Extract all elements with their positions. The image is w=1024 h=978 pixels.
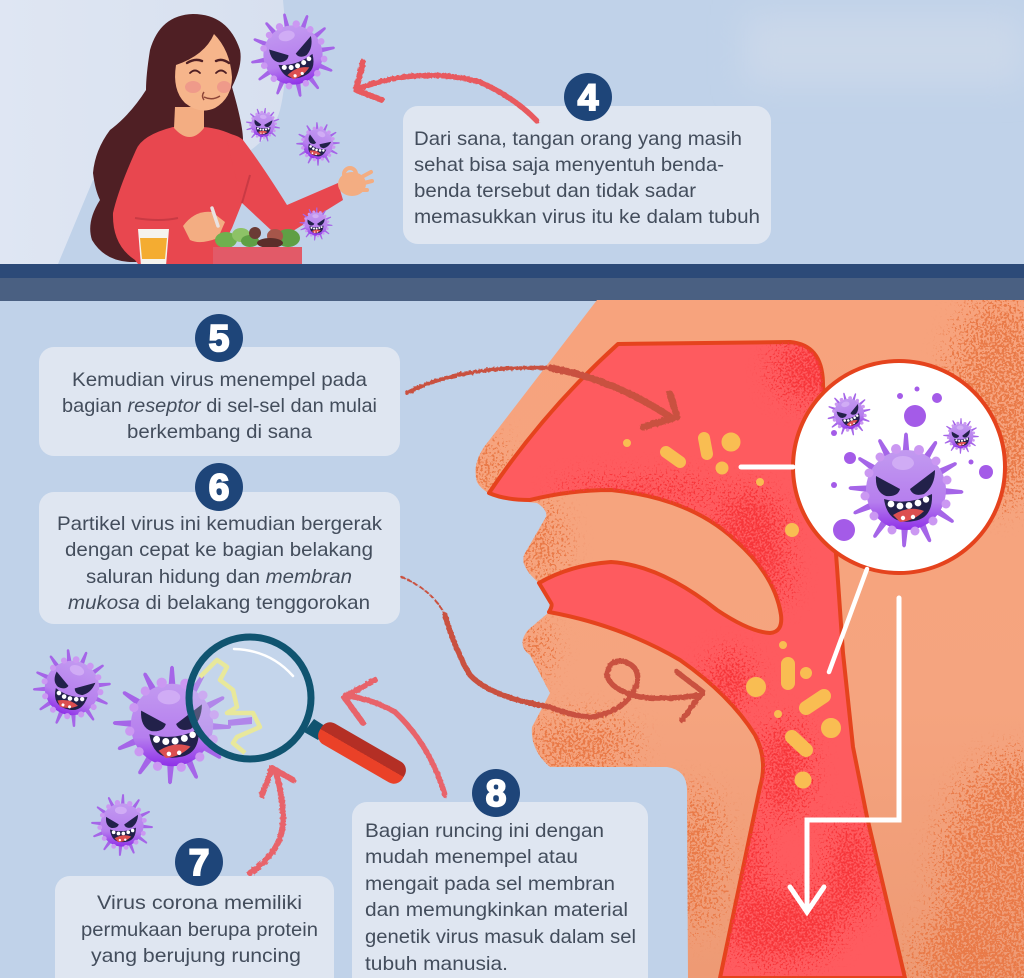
hand ok sign [338, 168, 372, 196]
text block 7 [81, 892, 318, 967]
salad bowl [213, 227, 302, 265]
cheeks [185, 81, 201, 93]
neck [174, 107, 204, 137]
text block 6: saluran hidung dan membran [86, 566, 352, 588]
magnifying glass [189, 637, 410, 787]
panel 5 [39, 347, 400, 456]
panel 4 [403, 106, 771, 244]
text block 7: yang berujung runcing [91, 945, 301, 967]
text block 6: Partikel virus ini kemudian bergerak [57, 513, 382, 535]
badge 6: 6 [209, 467, 229, 508]
text block 8 [365, 820, 636, 975]
virus: upper left [822, 388, 876, 441]
glass of juice [138, 229, 169, 266]
mouth [202, 92, 220, 100]
text block 4: Dari sana, tangan orang yang masih [414, 128, 742, 150]
badge 8: 8 [486, 773, 506, 814]
text block 8: genetik virus masuk dalam sel [365, 926, 636, 948]
smudge top right [745, 15, 1024, 85]
virus: small near arm [289, 115, 347, 173]
text block 5 [62, 369, 377, 443]
text block 5: Kemudian virus menempel pada [72, 369, 367, 391]
shine [234, 649, 293, 676]
text block 8: mengait pada sel membran [365, 873, 615, 895]
badge 4: 4 [578, 77, 599, 118]
badge 5: 5 [209, 318, 229, 359]
airway stipple shading [555, 338, 874, 963]
sweater arm [225, 133, 343, 231]
bubbles [831, 386, 993, 541]
text block 6: mukosa di belakang tenggorokan [68, 592, 370, 614]
text block 7: permukaan berupa protein [81, 919, 318, 941]
text block 6 [57, 513, 382, 614]
particles in nose [624, 433, 798, 536]
virus: lower left bottom [90, 793, 154, 857]
virus: upper right [943, 418, 979, 454]
light room wall [0, 0, 286, 264]
neck [304, 719, 328, 740]
badge 7 [175, 838, 223, 886]
sweater torso [113, 127, 243, 264]
sweater folds [135, 175, 250, 220]
text block 8: Bagian runcing ini dengan [365, 820, 604, 842]
airway [489, 342, 905, 978]
badge 8 [472, 769, 520, 817]
hair back [90, 14, 243, 262]
badge 4 [564, 73, 612, 121]
ring [189, 637, 311, 759]
hand with fork [183, 212, 225, 242]
virus: small near hand [298, 206, 334, 242]
text block 4: sehat bisa saja menyentuh benda- [414, 154, 724, 176]
text block 5: bagian reseptor di sel-sel dan mulai [62, 395, 377, 417]
virus: lower left top [21, 637, 123, 739]
text block 8: dan memungkinkan material [365, 899, 628, 921]
particles in throat [746, 642, 840, 788]
handle [314, 719, 410, 787]
arrow step 5 to nose [407, 368, 677, 427]
text block 8: mudah menempel atau [365, 846, 578, 868]
face [175, 34, 232, 111]
badge 7: 7 [189, 842, 209, 883]
face profile [476, 300, 1024, 978]
virus: top large [242, 5, 344, 106]
virus: small near hair [243, 106, 283, 145]
virus: magnified [113, 666, 231, 784]
text block 4: memasukkan virus itu ke dalam tubuh [414, 206, 760, 228]
zoom circle [793, 361, 1005, 573]
text block 8: tubuh manusia. [365, 953, 508, 975]
badge 6 [195, 463, 243, 511]
text block 7: Virus corona memiliki [97, 892, 302, 914]
descending white arrow [790, 598, 899, 912]
face stipple shading [463, 295, 1024, 978]
panel 8 [352, 802, 648, 978]
spike outline highlight [200, 660, 260, 753]
panel 6 [39, 492, 400, 624]
arrow step 8 to lens [344, 680, 445, 795]
arrow step 7 to lens [250, 768, 293, 873]
text block 5: berkembang di sana [127, 421, 312, 443]
table band [0, 264, 1024, 301]
glass [190, 638, 310, 758]
arrow step 6 to throat [388, 572, 703, 720]
pointer lines [741, 467, 867, 672]
text block 4 [414, 128, 760, 228]
text block 6: dengan cepat ke bagian belakang [65, 539, 373, 561]
panel 7 [55, 876, 334, 978]
text block 4: benda tersebut dan tidak sadar [414, 180, 697, 202]
virus: large [848, 432, 964, 548]
arrow to virus from step 4 [356, 62, 537, 121]
eyes [190, 70, 226, 73]
badge 5 [195, 314, 243, 362]
woman eating [90, 14, 372, 266]
